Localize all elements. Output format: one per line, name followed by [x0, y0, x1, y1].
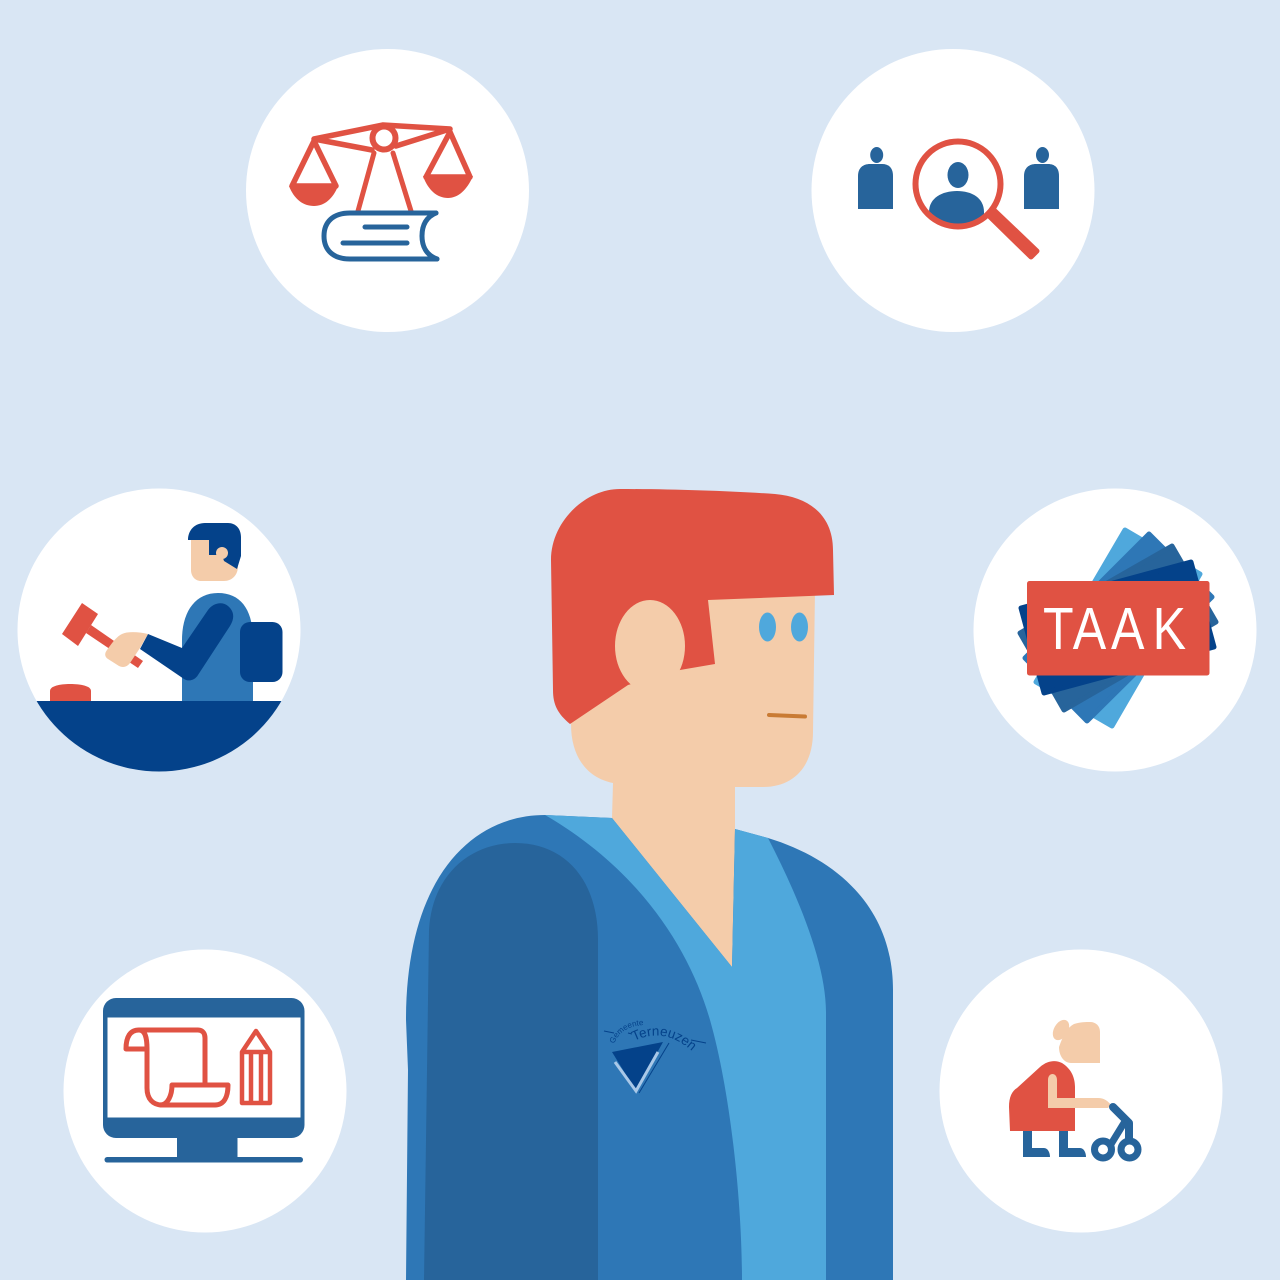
judge body	[182, 593, 253, 701]
panel: computer with document	[64, 950, 346, 1232]
logo: Gemeente Terneuzen	[604, 1020, 706, 1094]
judge arm	[140, 603, 233, 680]
icon: head	[1059, 1022, 1100, 1063]
icon: left person	[858, 147, 893, 209]
hair	[551, 489, 834, 724]
icon: arm	[1048, 1074, 1111, 1108]
icon: monitor	[103, 998, 304, 1162]
icon: book	[324, 213, 437, 259]
eyes	[759, 612, 808, 642]
icon: pencil	[242, 1031, 270, 1103]
jacket	[406, 815, 893, 1280]
task label	[1027, 581, 1210, 676]
icon: right person	[1024, 147, 1059, 209]
gavel sound block	[50, 684, 91, 701]
panel: search for people	[812, 49, 1094, 332]
icon: balance scales	[289, 125, 473, 211]
icon: fan of cards	[1020, 530, 1216, 726]
icon: walker	[1094, 1107, 1138, 1158]
main figure: civil servant	[406, 489, 893, 1280]
mouth	[769, 715, 805, 716]
icon: magnifying glass with person	[916, 142, 1037, 257]
logo: Gemeente Terneuzen: Gemeente	[610, 1020, 643, 1043]
judge hand	[105, 632, 148, 667]
logo: Gemeente Terneuzen: Terneuzen	[630, 1028, 696, 1050]
judge hair	[188, 523, 241, 569]
icon: hair bun	[1049, 1017, 1073, 1043]
panel: law scales on book	[246, 49, 529, 332]
icon: scroll	[126, 1030, 228, 1105]
judge head	[191, 538, 238, 581]
task label: TAAK	[1043, 595, 1186, 662]
neck and face	[571, 590, 815, 967]
sleeve	[424, 843, 598, 1280]
panel: elderly person with walker	[940, 950, 1222, 1232]
icon: legs	[1023, 1131, 1086, 1157]
gavel	[62, 603, 143, 668]
jacket light lapel	[545, 815, 826, 1280]
ear	[615, 600, 685, 692]
icon: dress	[1009, 1061, 1075, 1131]
panel: task cards	[974, 488, 1256, 772]
judge bench	[36, 701, 282, 772]
panel: judge with gavel	[15, 488, 305, 776]
judge ear	[216, 547, 228, 559]
backpack	[240, 622, 282, 682]
